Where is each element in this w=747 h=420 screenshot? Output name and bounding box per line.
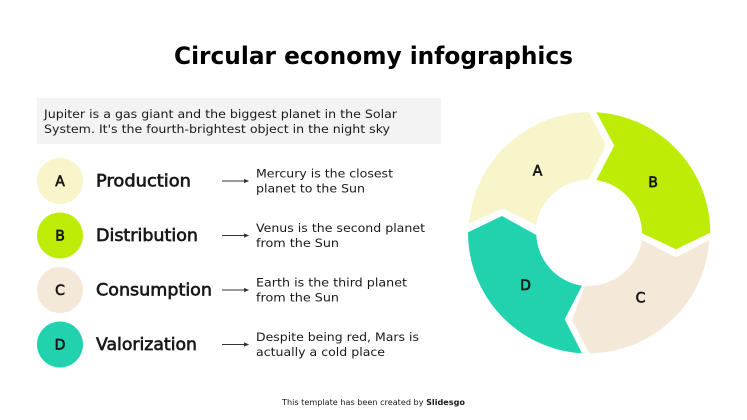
arrow A (222, 180, 248, 182)
label Production: Production (96, 172, 191, 190)
arrow B (222, 234, 248, 237)
badge B: B (55, 228, 65, 244)
badge C (37, 267, 83, 313)
badge A (37, 158, 83, 204)
row A: Production (37, 158, 394, 204)
arrow C (222, 288, 248, 292)
description D: actually a cold place (256, 345, 385, 359)
description D: Despite being red, Mars is (256, 330, 419, 344)
intro text block (37, 98, 441, 144)
description A: planet to the Sun (256, 182, 365, 196)
row C: Consumption (37, 267, 408, 313)
row B: Distribution (37, 212, 426, 258)
segment D: D (520, 278, 531, 294)
badge A: A (55, 174, 65, 190)
circular cycle diagram (468, 112, 710, 353)
segment A: A (533, 164, 543, 180)
segment B (596, 112, 710, 249)
footer credit: This template has been created by Slidesgo (281, 398, 465, 407)
description B: from the Sun (256, 236, 339, 250)
segment A (469, 112, 606, 225)
description C: from the Sun (256, 290, 339, 304)
arrow D (222, 343, 248, 346)
badge D: D (55, 338, 65, 354)
badge D (37, 322, 83, 368)
intro text block: System. It's the fourth-brightest object in the night sky (44, 122, 390, 136)
title: Circular economy infographics (174, 42, 573, 70)
row D: Valorization (37, 322, 419, 368)
label Valorization: Valorization (96, 335, 197, 354)
badge C: C (55, 283, 65, 299)
label Consumption: Consumption (96, 280, 212, 300)
segment D (468, 216, 582, 353)
description C: Earth is the third planet (256, 276, 408, 290)
segment B: B (648, 175, 658, 191)
badge B (37, 212, 83, 258)
description A: Mercury is the closest (256, 166, 394, 180)
description B: Venus is the second planet (256, 221, 426, 235)
label Distribution: Distribution (96, 226, 198, 245)
segment C (572, 240, 709, 353)
segment C: C (636, 290, 646, 306)
intro text block: Jupiter is a gas giant and the biggest planet in the Solar (43, 107, 397, 121)
